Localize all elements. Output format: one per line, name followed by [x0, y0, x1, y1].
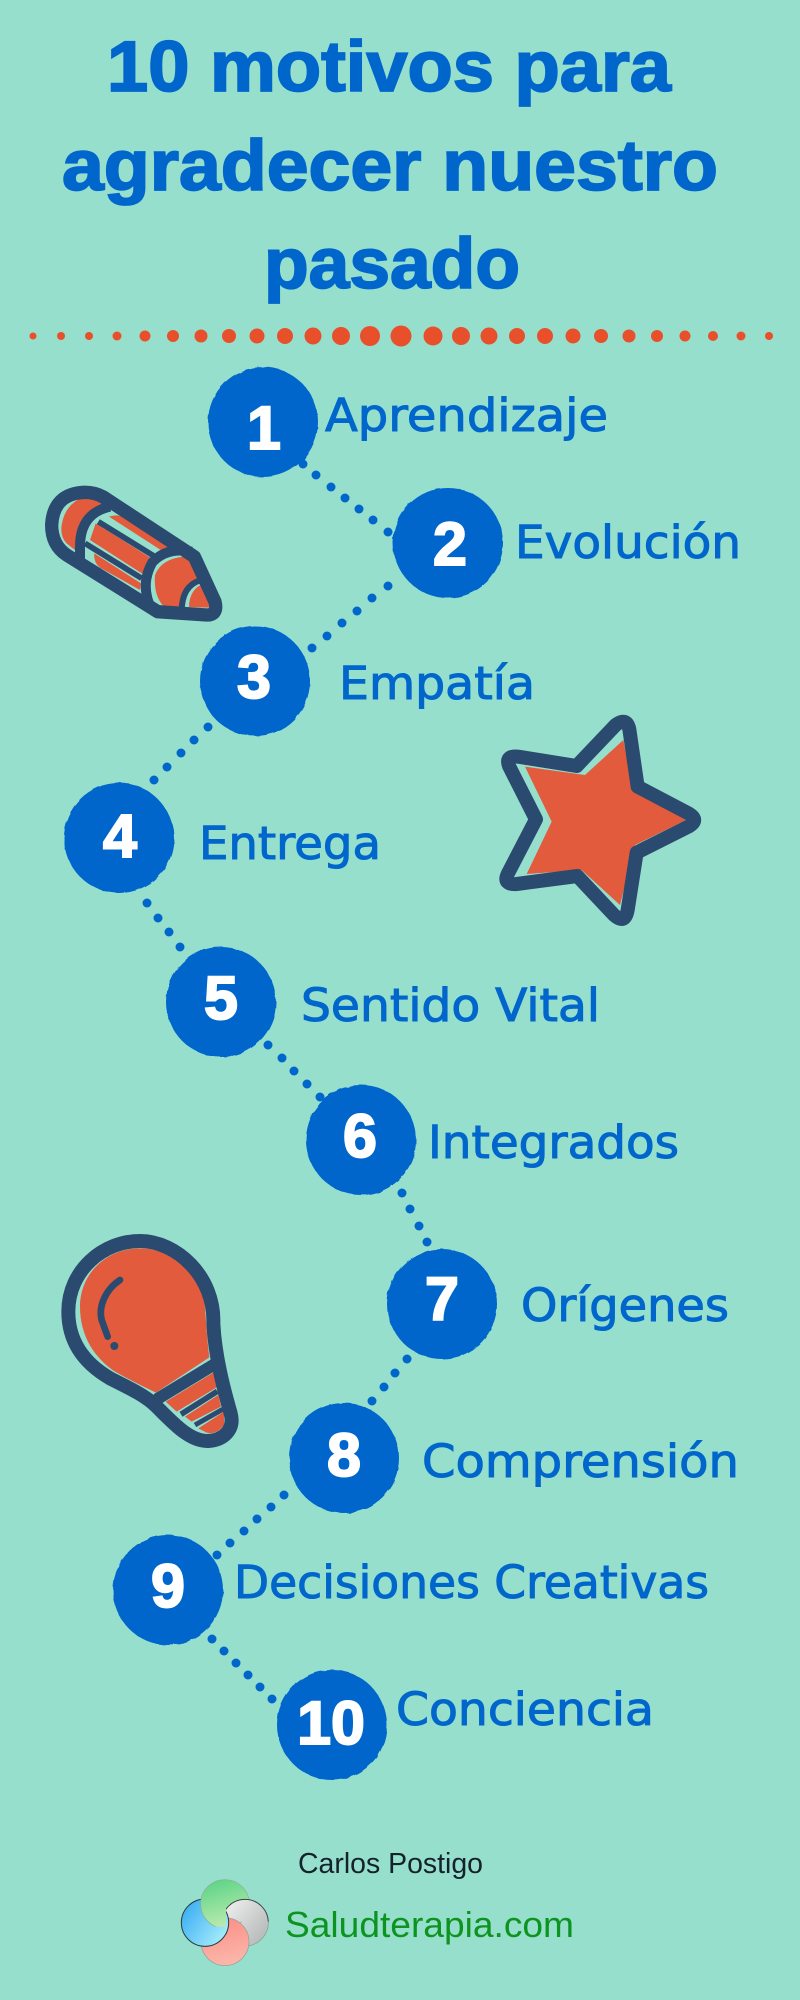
- number circles: [64, 367, 503, 1780]
- website name: Saludterapia.com: [285, 1904, 574, 1945]
- title: pasado: [264, 225, 520, 304]
- numbers: 5: [204, 964, 238, 1032]
- numbers: 10: [297, 1689, 365, 1757]
- numbers: 3: [237, 643, 271, 711]
- numbers: [103, 394, 467, 1757]
- numbers: 9: [151, 1552, 185, 1620]
- labels: Sentido Vital: [301, 979, 600, 1032]
- icon: light bulb: [68, 1241, 232, 1441]
- labels: Comprensión: [422, 1435, 739, 1488]
- dotted divider: [30, 326, 773, 346]
- labels: Decisiones Creativas: [234, 1556, 709, 1609]
- numbers: 2: [433, 510, 467, 578]
- labels: Aprendizaje: [325, 389, 608, 442]
- labels: Evolución: [515, 516, 741, 569]
- labels: [199, 389, 741, 1736]
- labels: Empatía: [339, 657, 535, 710]
- icon: star: [506, 722, 694, 919]
- icon: pencil: [52, 492, 216, 615]
- author name: Carlos Postigo: [298, 1848, 483, 1880]
- labels: Orígenes: [521, 1279, 729, 1332]
- numbers: 8: [327, 1421, 361, 1489]
- labels: Conciencia: [396, 1683, 654, 1736]
- icon: logo: [181, 1880, 268, 1966]
- title: 10 motivos para: [107, 28, 672, 107]
- numbers: 6: [343, 1102, 377, 1170]
- labels: Integrados: [428, 1116, 679, 1169]
- labels: Entrega: [199, 817, 381, 870]
- title: agradecer nuestro: [62, 127, 718, 206]
- dotted connectors: [142, 460, 432, 1704]
- numbers: 7: [425, 1265, 459, 1333]
- numbers: 4: [103, 802, 137, 870]
- numbers: 1: [247, 394, 281, 462]
- title: [62, 28, 718, 304]
